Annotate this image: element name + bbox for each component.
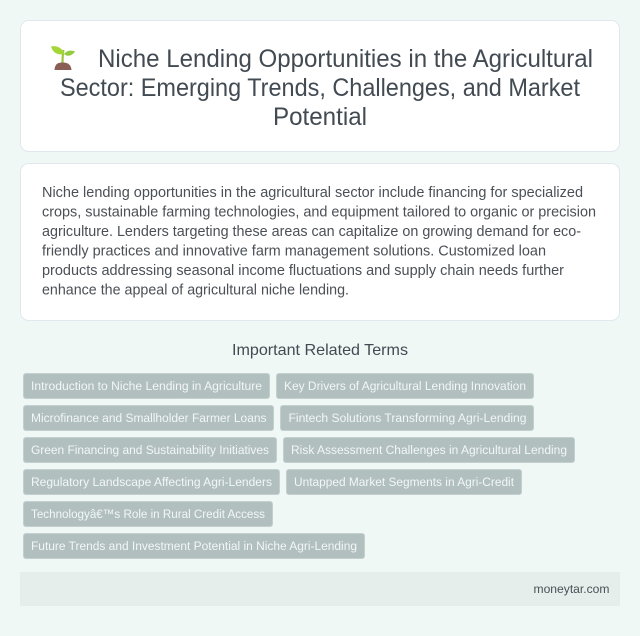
- footer bar: [20, 572, 620, 606]
- footer source text: moneytar.com: [534, 582, 610, 596]
- tag: Microfinance and Smallholder Farmer Loans: [31, 411, 266, 425]
- tag: [24, 406, 274, 430]
- panel: title card: [20, 20, 620, 152]
- tag: [280, 406, 534, 430]
- tag: [286, 470, 522, 494]
- tag: Technologyâ€™s Role in Rural Credit Access: [31, 507, 265, 521]
- tag: [24, 534, 364, 558]
- tag: Green Financing and Sustainability Initiatives: [31, 443, 269, 457]
- tag: Future Trends and Investment Potential in Niche Agri-Lending: [31, 539, 357, 553]
- description paragraph: friendly practices and innovative farm management solutions. Customized loan: [42, 244, 546, 260]
- tag: [24, 374, 270, 398]
- tag: Fintech Solutions Transforming Agri-Lending: [288, 411, 526, 425]
- title text: Niche Lending Opportunities in the Agricultural: [98, 45, 593, 73]
- heading: important related terms: Important Related Terms: [232, 342, 408, 359]
- tag: Introduction to Niche Lending in Agriculture: [31, 379, 262, 393]
- tag: [24, 502, 272, 526]
- tag list: [24, 374, 574, 558]
- description paragraph: Niche lending opportunities in the agricultural sector include financing for specialized: [42, 185, 583, 201]
- title text: Potential: [273, 103, 367, 131]
- description paragraph: products addressing seasonal income fluctuations and supply chain needs further: [42, 263, 564, 279]
- tag: [284, 438, 574, 462]
- icon: seedling: [51, 46, 75, 70]
- tag: Key Drivers of Agricultural Lending Innovation: [284, 379, 526, 393]
- description paragraph: crops, sustainable farming technologies, and equipment tailored to organic or precision: [42, 204, 596, 220]
- description paragraph: agriculture. Lenders targeting these areas can capitalize on growing demand for eco-: [42, 224, 581, 240]
- description paragraph: [42, 185, 596, 298]
- tag: Untapped Market Segments in Agri-Credit: [294, 475, 515, 489]
- description paragraph: enhance the appeal of agricultural niche lending.: [42, 282, 349, 298]
- tag: [24, 470, 280, 494]
- tag: [276, 374, 534, 398]
- tag: [24, 438, 276, 462]
- title text: Sector: Emerging Trends, Challenges, and Market: [60, 74, 580, 102]
- title text: [60, 45, 593, 131]
- tag: Regulatory Landscape Affecting Agri-Lenders: [31, 475, 272, 489]
- panel: description card: [20, 164, 620, 320]
- tag: Risk Assessment Challenges in Agricultural Lending: [291, 443, 567, 457]
